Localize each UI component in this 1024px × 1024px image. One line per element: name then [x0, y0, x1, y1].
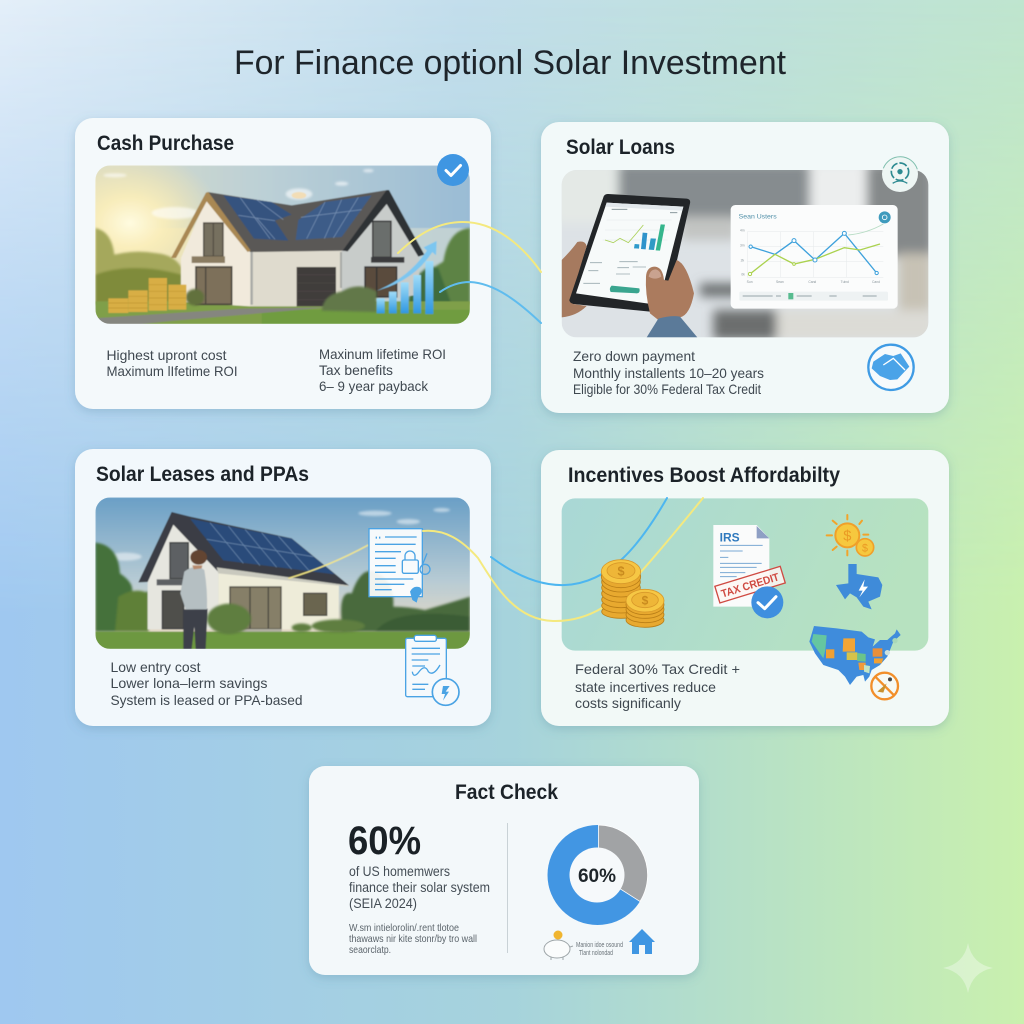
- text: statistic description: [349, 864, 490, 911]
- text: loan benefits: [573, 348, 764, 397]
- text: loan benefits: Zero down payment: [573, 348, 695, 364]
- text: right benefits: Maxinum lifetime ROI: [319, 346, 446, 362]
- image: house with solar panels, coins and growth bars: [95, 165, 470, 324]
- decorative sparkle: [943, 943, 993, 993]
- text: loan benefits: Monthly installents 10–20 years: [573, 365, 764, 381]
- text: piggy caption: [576, 942, 623, 957]
- text: incentive summary: costs significanly: [575, 695, 681, 711]
- icon: coin stacks: [601, 560, 664, 627]
- text: fine print: seaorclatp.: [349, 944, 391, 956]
- text: piggy caption: Manion idoe osound: [576, 942, 623, 949]
- text: left benefits: [106, 347, 238, 379]
- icon: IRS tax credit document: TAX CREDIT: [720, 571, 781, 600]
- walls: [181, 198, 250, 306]
- icon: Texas with bolt: [836, 564, 882, 609]
- text: right benefits: [319, 346, 446, 394]
- image: house with homeowner: [95, 497, 470, 705]
- floating chart card: [731, 205, 898, 309]
- heading: solar leases: Solar Leases and PPAs: [96, 463, 309, 486]
- text: right benefits: Tax benefits: [319, 362, 393, 378]
- image: tablet with loan dashboard: Sean Usters: [739, 214, 777, 221]
- image: tablet with loan dashboard: [553, 156, 933, 390]
- icon: prohibited sign: [871, 673, 898, 699]
- donut chart: [548, 825, 648, 925]
- text: loan benefits: Eligible for 30% Federal Tax Credit: [573, 381, 761, 397]
- panel: solar loans: [541, 122, 949, 413]
- shrubs: [186, 286, 377, 312]
- icon: check badge: [437, 154, 469, 186]
- image: tablet with loan dashboard: Cand: [808, 280, 816, 284]
- image: tablet with loan dashboard: Sun: [747, 280, 753, 284]
- icon: contract document: [369, 529, 430, 603]
- text: statistic description: (SEIA 2024): [349, 896, 417, 911]
- icon: clipboard with bolt: [406, 635, 459, 705]
- icon: handshake: [868, 345, 914, 390]
- icon: savings badge: [882, 156, 918, 192]
- statistic: 60 percent: 60%: [348, 819, 421, 863]
- text: incentive summary: [575, 661, 740, 711]
- panel: fact check: [309, 766, 699, 975]
- icon: sun with dollar coins: [827, 515, 874, 556]
- text: statistic description: finance their solar system: [349, 880, 490, 895]
- text: incentive summary: Federal 30% Tax Credit +: [575, 661, 740, 677]
- image: tablet with loan dashboard: 2k: [741, 258, 745, 262]
- text: fine print: thawaws nir kite stonr/by tro wall: [349, 933, 477, 945]
- text: statistic description: of US homemwers: [349, 864, 450, 879]
- icon: IRS tax credit document: [713, 525, 785, 618]
- text: lease benefits: Lower lona–lerm savings: [110, 675, 268, 691]
- image: tablet with loan dashboard: Tuind: [841, 280, 849, 284]
- text: incentive summary: state incertives reduce: [575, 679, 716, 695]
- heading: incentives: Incentives Boost Affordabilty: [568, 464, 840, 487]
- text: left benefits: Highest upront cost: [106, 347, 227, 363]
- icon: sun with dollar coins: $: [843, 529, 851, 545]
- hands: [562, 241, 587, 317]
- text: fine print: [349, 922, 477, 956]
- image: incentive icons on green panel: [562, 498, 928, 699]
- donut chart: 60%: [578, 866, 616, 887]
- icon: coin stacks: $: [642, 594, 649, 608]
- heading: cash purchase: Cash Purchase: [97, 132, 234, 155]
- growth bars: [377, 261, 433, 314]
- icon: sun with dollar coins: $: [862, 542, 868, 554]
- image: tablet with loan dashboard: 4m: [740, 229, 745, 233]
- text: fine print: W.sm intielorolin/.rent tlotoe: [349, 922, 459, 934]
- coins: [108, 278, 186, 313]
- heading: fact check: Fact Check: [455, 781, 558, 804]
- panel: cash purchase: [37, 118, 491, 409]
- connector curves: [398, 222, 703, 621]
- tablet: [569, 194, 690, 313]
- text: lease benefits: System is leased or PPA-based: [110, 692, 302, 708]
- text: left benefits: Maximum lIfetime ROI: [106, 363, 238, 379]
- image: tablet with loan dashboard: 0k: [741, 272, 745, 276]
- house: [148, 522, 218, 629]
- icon: IRS tax credit document: IRS: [720, 530, 740, 544]
- image: tablet with loan dashboard: 3m: [740, 243, 745, 247]
- icon: coin stacks: $: [617, 564, 625, 578]
- icon: piggy bank: [544, 930, 573, 960]
- panel: solar leases and ppas: [75, 449, 491, 726]
- windows and doors: [204, 223, 223, 256]
- heading: solar loans: Solar Loans: [566, 136, 675, 159]
- text: lease benefits: [110, 659, 302, 708]
- icon: US map: [809, 626, 901, 685]
- panel: incentives: [541, 450, 949, 726]
- roof: [208, 190, 388, 252]
- person: [183, 609, 208, 649]
- image: tablet with loan dashboard: Sean: [776, 280, 784, 284]
- image: tablet with loan dashboard: Cand: [872, 280, 880, 284]
- text: piggy caption: Tlant nolondad: [579, 950, 613, 957]
- text: right benefits: 6– 9 year payback: [319, 378, 429, 394]
- icon: house: [629, 929, 655, 954]
- text: lease benefits: Low entry cost: [110, 659, 201, 675]
- title: For Finance optionl Solar Investment: [234, 44, 787, 82]
